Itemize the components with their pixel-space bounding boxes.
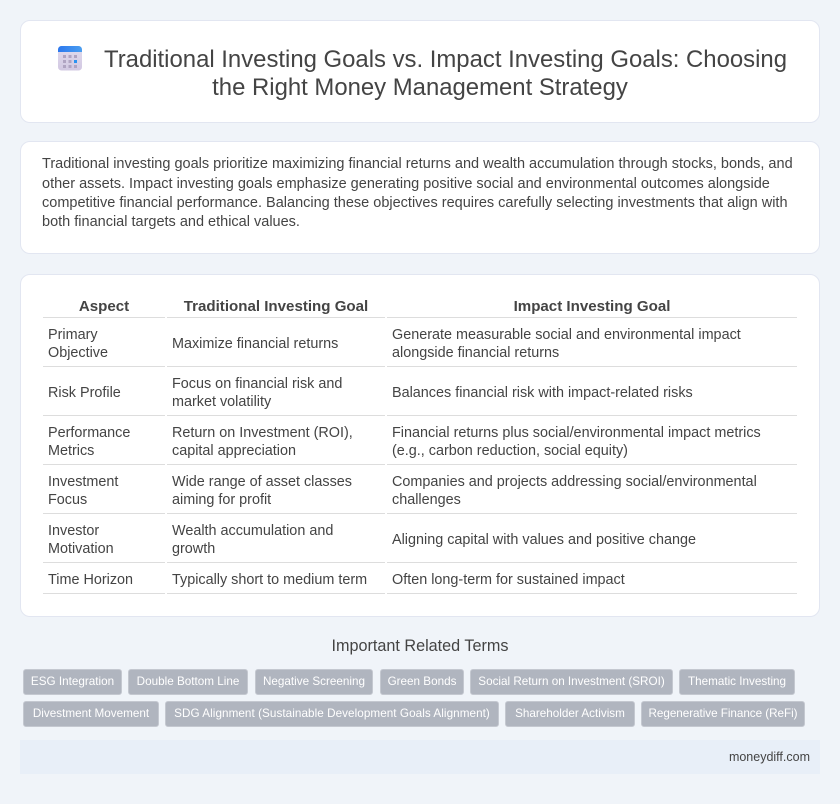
tags: related terms xyxy=(23,669,805,727)
text: alongside financial returns xyxy=(392,345,559,361)
tags: related terms: Social Return on Investment (SROI) xyxy=(478,675,665,688)
footer bar xyxy=(20,740,820,774)
tags: related terms: Green Bonds xyxy=(388,675,456,688)
tags: related terms: Negative Screening xyxy=(263,675,365,688)
title: the Right Money Management Strategy xyxy=(212,74,628,101)
table header: traditional investing goal: Traditional Investing Goal xyxy=(184,298,368,315)
text: Generate measurable social and environmental impact xyxy=(392,327,741,343)
text: (e.g., carbon reduction, social equity) xyxy=(392,443,628,459)
text: Wealth accumulation and xyxy=(172,523,333,539)
row: performance metrics: Performance xyxy=(48,425,130,441)
icon: calendar xyxy=(58,46,82,70)
tags: related terms: Thematic Investing xyxy=(688,675,786,688)
text: Financial returns plus social/environmental impact metrics xyxy=(392,425,761,441)
text: Focus on financial risk and xyxy=(172,376,342,392)
tags: related terms: Divestment Movement xyxy=(33,707,149,720)
text: description: both financial targets and ethical values. xyxy=(42,214,300,230)
heading: related terms: Important Related Terms xyxy=(332,637,508,655)
text: aiming for profit xyxy=(172,492,271,508)
text: capital appreciation xyxy=(172,443,296,459)
table header: aspect: Aspect xyxy=(79,298,129,315)
text: description: Traditional investing goals prioritize maximizing financial returns and wealth accumulation through stocks, bonds, and xyxy=(42,156,793,172)
row: time horizon: Time Horizon xyxy=(48,572,133,588)
panel: title header xyxy=(20,20,820,123)
tags: related terms: Shareholder Activism xyxy=(515,707,625,720)
text: description: other assets. Impact investing goals emphasize generating positive social and environmental outcomes alongside xyxy=(42,176,770,192)
text: description: competitive financial performance. Balancing these objectives requires carefully selecting investments that align with xyxy=(42,195,788,211)
tags: related terms: ESG Integration xyxy=(31,675,114,688)
text: Typically short to medium term xyxy=(172,572,367,588)
title: Traditional Investing Goals vs. Impact Investing Goals: Choosing xyxy=(104,46,787,73)
text: Companies and projects addressing social/environmental xyxy=(392,474,757,490)
row: performance metrics: Metrics xyxy=(48,443,94,459)
row: investment focus: Focus xyxy=(48,492,87,508)
tags: related terms: SDG Alignment (Sustainable Development Goals Alignment) xyxy=(174,707,490,720)
row: investor motivation: Motivation xyxy=(48,541,114,557)
row: primary objective: Objective xyxy=(48,345,108,361)
text: challenges xyxy=(392,492,461,508)
tags: related terms: Regenerative Finance (ReFi) xyxy=(648,707,797,720)
panel: description xyxy=(20,141,820,254)
row: risk profile: Risk Profile xyxy=(48,385,121,401)
row: investor motivation: Investor xyxy=(48,523,99,539)
text: Return on Investment (ROI), xyxy=(172,425,353,441)
text: Wide range of asset classes xyxy=(172,474,352,490)
row: primary objective xyxy=(48,327,108,361)
row: primary objective: Primary xyxy=(48,327,98,343)
text: description xyxy=(42,156,793,230)
text: Balances financial risk with impact-related risks xyxy=(392,385,693,401)
row: performance metrics xyxy=(48,425,130,459)
footer: source: moneydiff.com xyxy=(729,750,810,764)
title xyxy=(104,46,787,101)
row: investor motivation xyxy=(48,523,114,557)
text: Often long-term for sustained impact xyxy=(392,572,625,588)
tags: related terms: Double Bottom Line xyxy=(137,675,239,688)
row: investment focus xyxy=(48,474,118,508)
panel: comparison table xyxy=(20,274,820,617)
table header: impact investing goal: Impact Investing Goal xyxy=(514,298,670,315)
text: Maximize financial returns xyxy=(172,336,338,352)
row: investment focus: Investment xyxy=(48,474,118,490)
text: Aligning capital with values and positive change xyxy=(392,532,696,548)
text: growth xyxy=(172,541,215,557)
text: market volatility xyxy=(172,394,271,410)
